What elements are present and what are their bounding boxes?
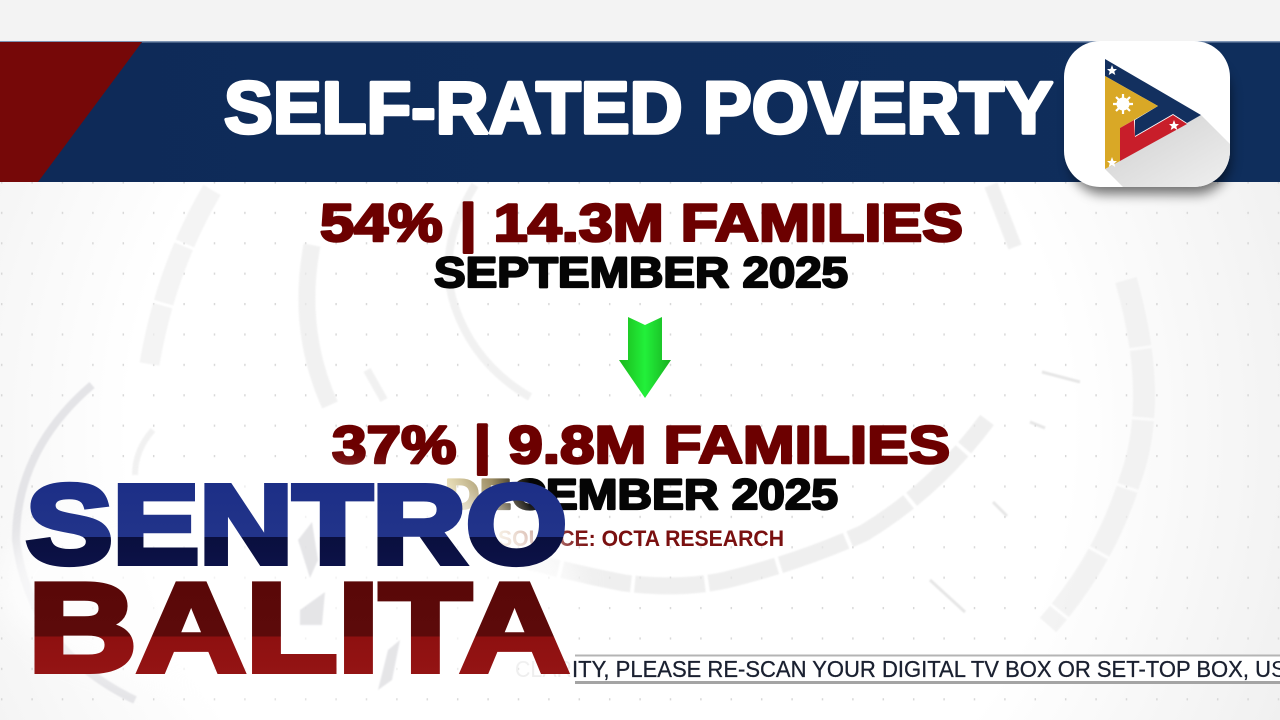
- logo shadow: [1070, 60, 1230, 194]
- logo: PTV app icon: [1064, 41, 1232, 190]
- december date: DECEMBER 2025: [445, 471, 838, 519]
- Sentro wordmark: SENTRO: [26, 462, 567, 587]
- red chevron: [1120, 115, 1187, 161]
- Balita wordmark: BALITA: [28, 557, 569, 698]
- ticker band: [500, 654, 1280, 684]
- gold triangle: [1105, 76, 1158, 169]
- red corner accent: [0, 42, 142, 182]
- title: SELF-RATED POVERTY: [224, 68, 1053, 149]
- stat: December: [332, 416, 950, 551]
- star bottom: [1107, 157, 1117, 167]
- december figure: 37% | 9.8M FAMILIES: [332, 416, 950, 476]
- stat: September: [320, 194, 963, 297]
- star top: [1107, 65, 1117, 75]
- navy triangle: [1105, 59, 1201, 136]
- map silhouette: [298, 522, 400, 690]
- show logo: Sentro Balita: [26, 462, 569, 698]
- source: SOURCE: OCTA RESEARCH: [498, 526, 784, 551]
- sun: [1113, 94, 1133, 114]
- september figure: 54% | 14.3M FAMILIES: [320, 194, 963, 254]
- arrow: green down: [619, 317, 671, 398]
- faded ticker start: CLAR: [515, 656, 572, 682]
- september date: SEPTEMBER 2025: [434, 249, 848, 297]
- star right: [1169, 120, 1179, 130]
- long shadow: [1105, 115, 1232, 190]
- header banner: [0, 41, 1280, 182]
- white glow behind show logo: [0, 475, 580, 695]
